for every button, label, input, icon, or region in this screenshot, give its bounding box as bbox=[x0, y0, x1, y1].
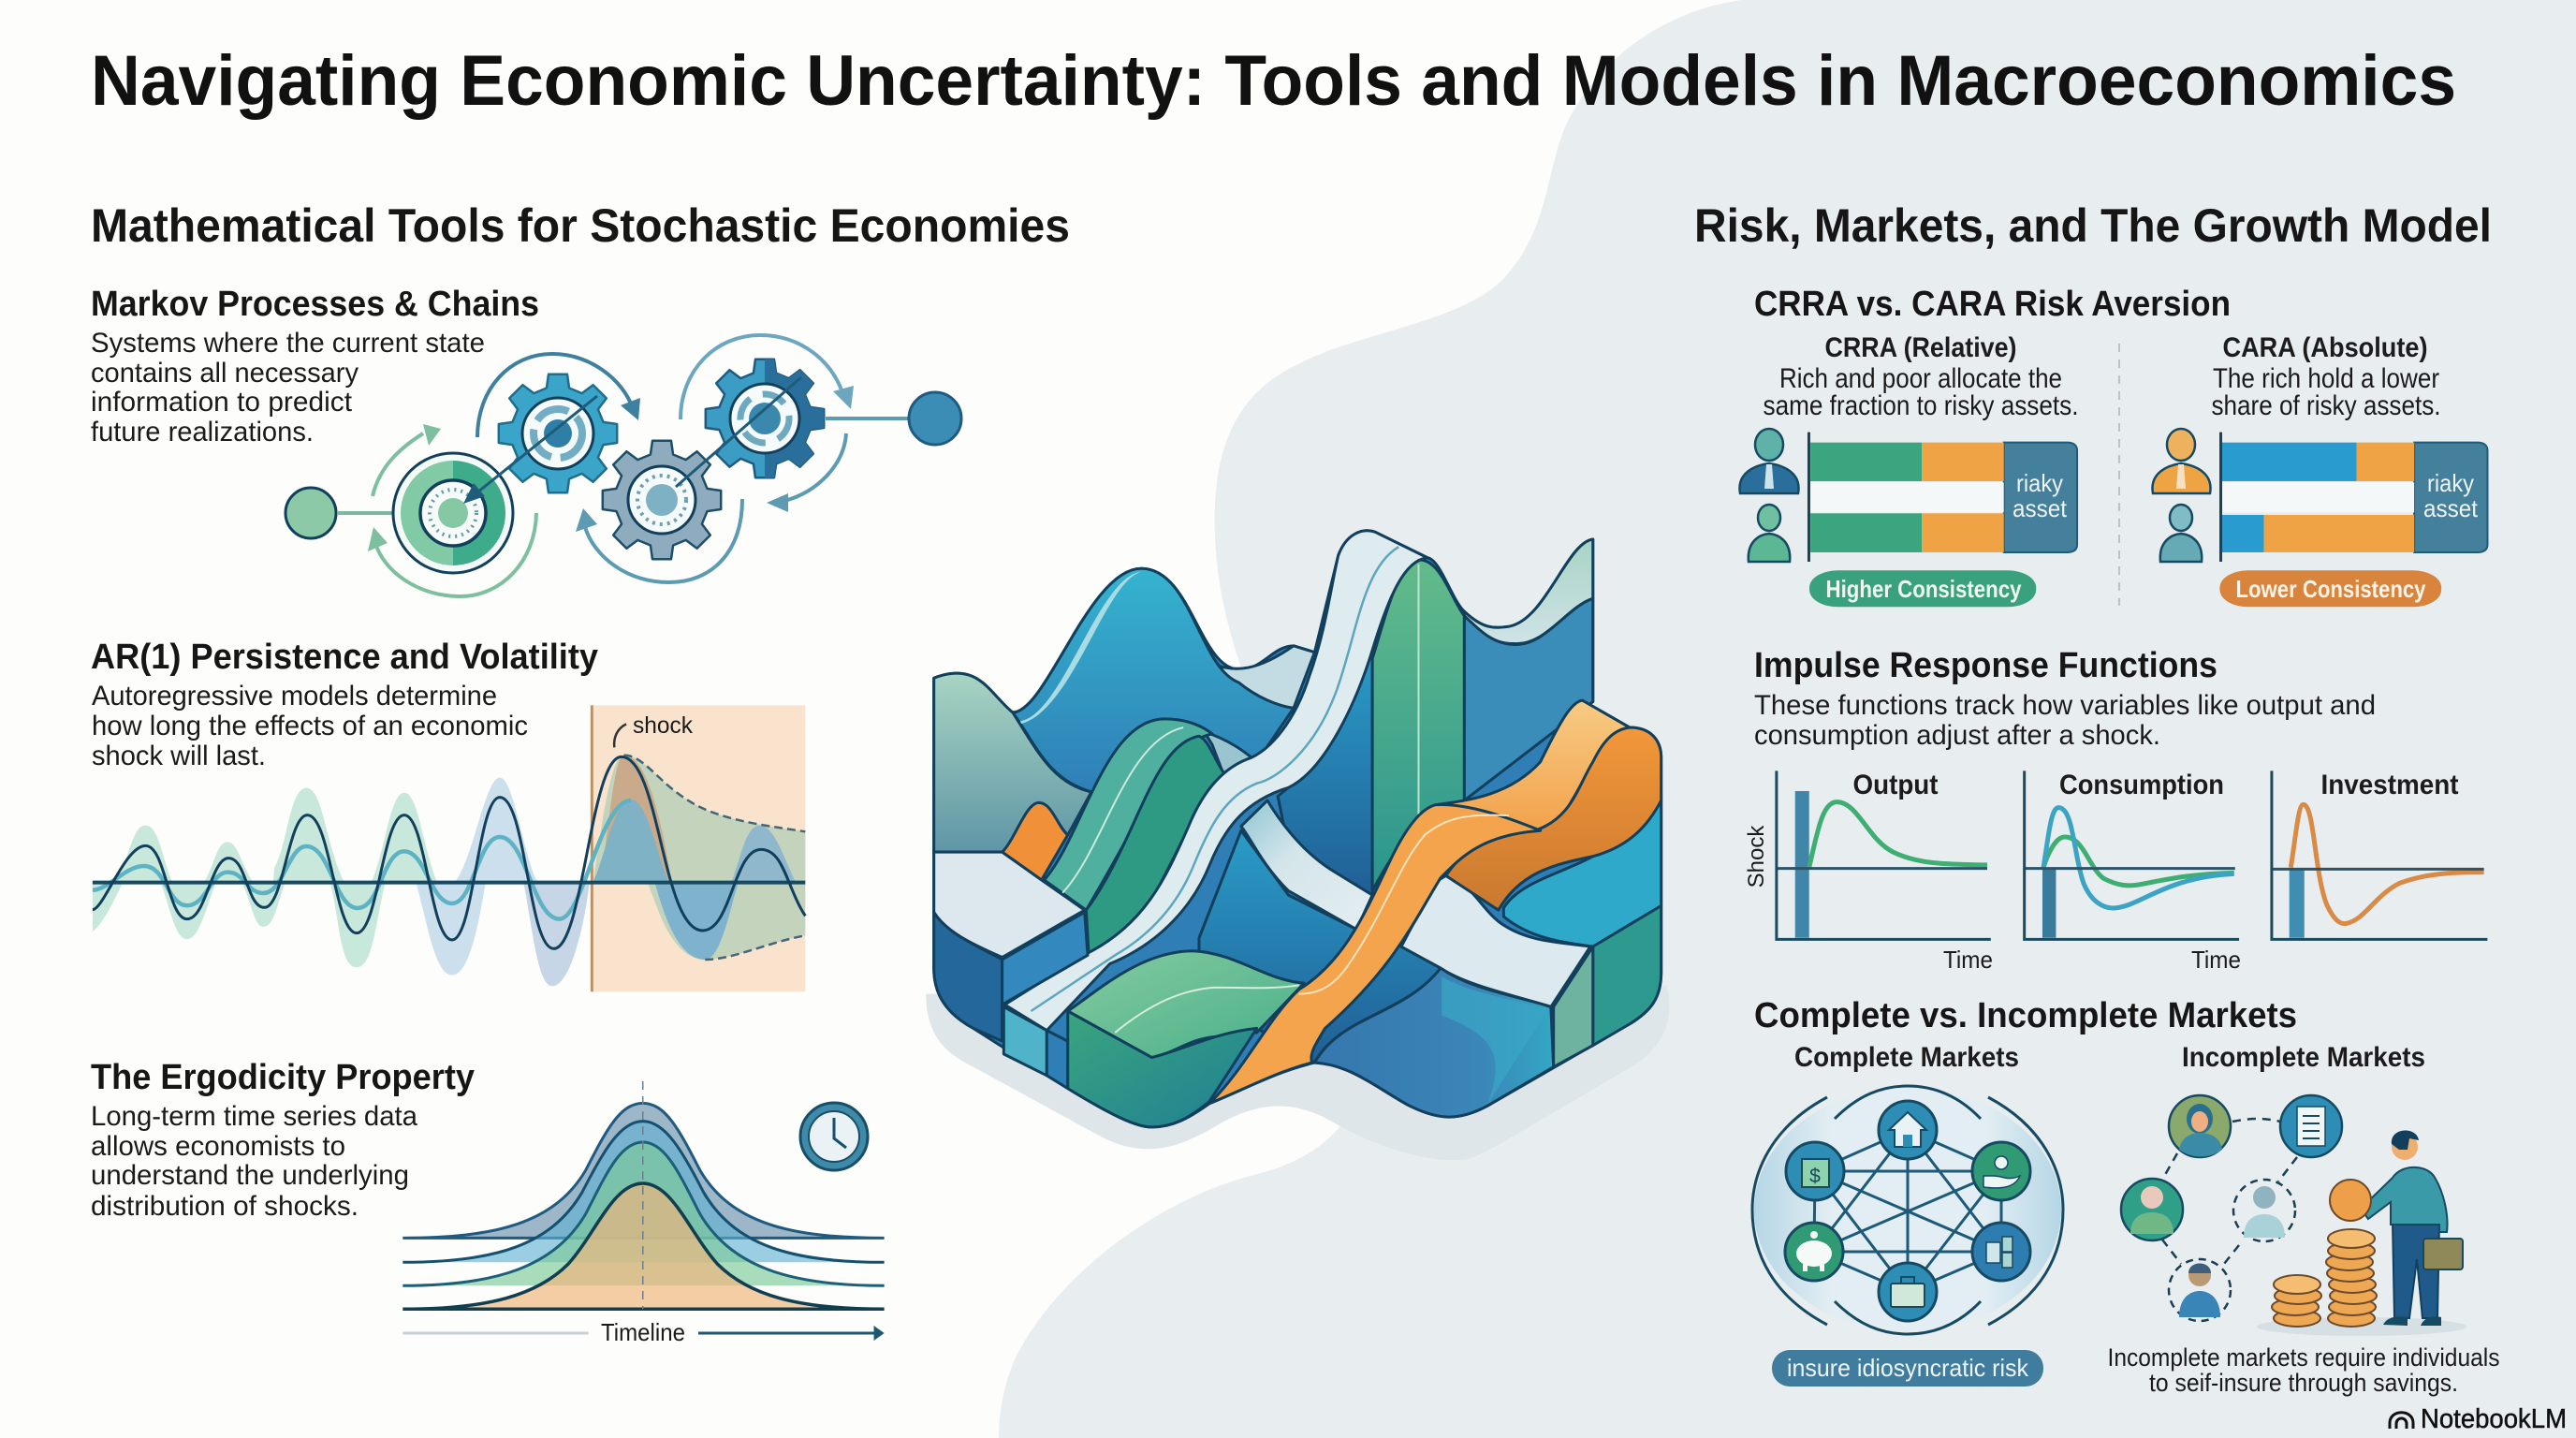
person: green bbox=[2121, 1179, 2183, 1240]
mid blue wall bbox=[1199, 830, 1441, 1063]
title: Navigating Economic Uncertainty: Tools and Models in Macroeconomics bbox=[91, 41, 2456, 121]
coin stack: short bbox=[2272, 1275, 2321, 1327]
orange peak small bbox=[1003, 802, 1068, 880]
label: investment: Investment bbox=[2321, 770, 2458, 800]
dark wave bbox=[93, 756, 805, 948]
dashed bound bbox=[623, 756, 805, 831]
node: calendar: $ bbox=[1809, 1166, 1821, 1187]
ground shadow bbox=[926, 985, 1669, 1160]
front blue wall bbox=[1314, 968, 1554, 1117]
centre deep wall bbox=[1278, 650, 1372, 895]
node: boxes bbox=[1972, 1223, 2030, 1281]
background blob: right panel bbox=[999, 0, 2576, 1438]
panel: impulse response heading: Impulse Response Functions bbox=[1754, 646, 2217, 685]
left block top bbox=[934, 852, 1085, 958]
coin stack: tall bbox=[2326, 1229, 2377, 1327]
label: incomplete markets: Incomplete Markets bbox=[2182, 1042, 2425, 1073]
bell layer 3 bbox=[402, 1142, 885, 1285]
text: markov description: Systems where the current state bbox=[91, 328, 485, 359]
shoes bbox=[2383, 1316, 2441, 1326]
text: CRRA description: same fraction to risky assets. bbox=[1764, 390, 2078, 421]
label: higher consistency: Higher Consistency bbox=[1825, 575, 2022, 603]
right light band bbox=[1401, 875, 1590, 1006]
sphere arcs bbox=[1752, 1086, 2063, 1334]
text: incomplete markets caption bbox=[2108, 1343, 2499, 1397]
arrow: gear 2 loop bbox=[576, 499, 742, 582]
text: AR(1) description bbox=[92, 681, 528, 771]
base silhouette bbox=[934, 531, 1661, 1127]
chart: risk allocation bars bbox=[1808, 433, 2487, 607]
icon: document bbox=[2280, 1095, 2342, 1157]
CARA bars bbox=[2221, 433, 2487, 562]
far right wall blue bbox=[1464, 598, 1593, 800]
labels: risky asset left: asset bbox=[2012, 494, 2068, 522]
head bbox=[2392, 1134, 2418, 1160]
label: insure idiosyncratic risk: insure idiosyncratic risk bbox=[1787, 1354, 2029, 1382]
node: piggy bank bbox=[1785, 1223, 1843, 1281]
bell layer 2 bbox=[402, 1122, 885, 1262]
heading: left section: Mathematical Tools for Stochastic Economies bbox=[91, 199, 1070, 252]
text: incomplete markets caption: Incomplete markets require individuals bbox=[2108, 1343, 2499, 1372]
icon: poor person CARA bbox=[2160, 505, 2202, 562]
arrow: green top bbox=[373, 424, 441, 496]
pill: lower consistency bbox=[2219, 570, 2441, 607]
text: impulse response description: consumption adjust after a shock. bbox=[1754, 720, 2160, 751]
labels: risky asset right: asset bbox=[2423, 494, 2479, 522]
text: CARA description bbox=[2211, 363, 2441, 421]
far right wall light bbox=[1464, 539, 1593, 644]
gear: green dial bbox=[393, 453, 513, 573]
orange ribbon diagonal bbox=[1209, 804, 1541, 1104]
tall green wall bbox=[1372, 560, 1464, 890]
volatility bands: green bbox=[93, 788, 438, 967]
text: CRRA description: Rich and poor allocate the bbox=[1779, 363, 2062, 394]
right green corner bbox=[1593, 906, 1661, 1046]
sphere background bbox=[1754, 1088, 2061, 1331]
text: ergodicity description bbox=[91, 1101, 417, 1222]
text: markov description: information to predict bbox=[91, 387, 353, 418]
text: incomplete markets caption: to seif-insure through savings. bbox=[2149, 1369, 2458, 1397]
text: CARA label: CARA (Absolute) bbox=[2222, 332, 2428, 363]
right teal wall bbox=[1503, 800, 1661, 946]
panel: AR(1) heading: AR(1) Persistence and Volatility bbox=[91, 638, 598, 677]
person: dashed grey bbox=[2233, 1180, 2295, 1241]
person: dashed blue bbox=[2169, 1259, 2231, 1321]
shock panel bbox=[592, 705, 805, 991]
diagram: markov gears bbox=[285, 335, 961, 596]
text: AR(1) description: Autoregressive models determine bbox=[92, 681, 497, 712]
text: ergodicity description: Long-term time series data bbox=[91, 1101, 417, 1132]
ground shadow bbox=[2257, 1317, 2466, 1336]
chart: consumption bbox=[2025, 770, 2239, 939]
green arch front bbox=[1086, 736, 1225, 955]
text: markov description: contains all necessary bbox=[91, 358, 359, 389]
panel: ergodicity heading: The Ergodicity Property bbox=[91, 1058, 475, 1097]
coin bbox=[2330, 1180, 2371, 1221]
label: shock axis: Shock bbox=[1744, 825, 1769, 888]
orange ribbon upper bbox=[1435, 700, 1630, 830]
bell layer 4 bbox=[402, 1183, 885, 1309]
shock envelope bbox=[593, 756, 805, 960]
node: house bbox=[1879, 1101, 1937, 1159]
text: ergodicity description: distribution of shocks. bbox=[91, 1191, 359, 1222]
dashed links bbox=[2162, 1119, 2297, 1264]
briefcase bbox=[2423, 1239, 2463, 1269]
labels: risky asset right: riaky bbox=[2427, 469, 2474, 497]
labels: risky asset right bbox=[2423, 469, 2479, 522]
green block front bbox=[1068, 1011, 1257, 1127]
second light ribbon bbox=[1241, 800, 1372, 930]
label: time axis 1: Time bbox=[1943, 946, 1993, 974]
back wave light bbox=[1215, 646, 1314, 708]
mean line bbox=[642, 1081, 644, 1309]
arrow: gear 3 return bbox=[767, 433, 846, 512]
text: CRRA description bbox=[1764, 363, 2078, 421]
chart: output bbox=[1777, 770, 1991, 939]
node: helping hand bbox=[1972, 1142, 2030, 1200]
green block top bbox=[1068, 951, 1304, 1058]
diagram: complete markets network bbox=[1752, 1086, 2063, 1334]
panel: markets heading: Complete vs. Incomplete Markets bbox=[1754, 996, 2297, 1035]
text: ergodicity description: allows economists to bbox=[91, 1131, 345, 1162]
node: end bbox=[909, 392, 961, 445]
labels: risky asset left: riaky bbox=[2016, 469, 2063, 497]
orange ribbon face bbox=[1446, 727, 1661, 910]
charts: impulse responses bbox=[1777, 770, 2487, 939]
label: timeline: Timeline bbox=[601, 1318, 685, 1346]
label: consumption: Consumption bbox=[2059, 770, 2224, 800]
bell layer 1 bbox=[402, 1103, 885, 1238]
label: lower consistency: Lower Consistency bbox=[2235, 575, 2426, 603]
network lines bbox=[1814, 1130, 2001, 1292]
panel: CRRA vs CARA heading: CRRA vs. CARA Risk Aversion bbox=[1754, 285, 2231, 324]
volatility bands: blue bbox=[417, 778, 590, 986]
green arch light side bbox=[1044, 719, 1212, 910]
text: CRRA label: CRRA (Relative) bbox=[1825, 332, 2016, 363]
pill: higher consistency bbox=[1809, 570, 2036, 607]
arrow: gear 3 loop bbox=[681, 335, 854, 419]
chart: investment bbox=[2272, 770, 2487, 939]
small step blocks bbox=[1003, 1006, 1046, 1076]
left pale wall bbox=[934, 673, 1091, 852]
label: time axis 2: Time bbox=[2191, 946, 2241, 974]
labels: risky asset left bbox=[2012, 469, 2068, 522]
left block front bbox=[934, 912, 1003, 1041]
node: calendar bbox=[1786, 1142, 1844, 1200]
node: start bbox=[285, 488, 336, 538]
chart: stacked distributions bbox=[402, 1081, 885, 1341]
text: ergodicity description: understand the underlying bbox=[91, 1160, 409, 1191]
panel: markov heading: Markov Processes & Chains bbox=[91, 285, 539, 324]
text: AR(1) description: shock will last. bbox=[92, 741, 266, 771]
axis bbox=[93, 881, 805, 885]
back wave blue bbox=[1013, 568, 1294, 792]
teal wave bbox=[93, 800, 631, 919]
timeline arrow bbox=[402, 1331, 589, 1334]
text: CARA description: share of risky assets. bbox=[2211, 390, 2441, 421]
label: output: Output bbox=[1853, 770, 1939, 800]
logo: NotebookLM: NotebookLM bbox=[2421, 1404, 2567, 1434]
icon: rich person CARA bbox=[2152, 429, 2211, 493]
label: shock: shock bbox=[633, 712, 693, 739]
gear: dark blue bbox=[706, 360, 824, 477]
text: impulse response description: These functions track how variables like output and bbox=[1754, 690, 2376, 721]
text: markov description: future realizations. bbox=[91, 417, 314, 448]
gear: grey bbox=[603, 441, 721, 559]
CRRA bars bbox=[1808, 433, 2077, 562]
text: impulse response description bbox=[1754, 690, 2376, 751]
person: olive bbox=[2169, 1095, 2231, 1157]
text: markov description bbox=[91, 328, 485, 448]
heading: right section: Risk, Markets, and The Growth Model bbox=[1694, 199, 2492, 252]
left block side bbox=[1003, 912, 1088, 1005]
chart: AR(1) oscillation bbox=[93, 705, 805, 991]
icon: rich person CRRA bbox=[1739, 429, 1799, 493]
legs bbox=[2393, 1222, 2439, 1318]
figure: person saving bbox=[2330, 1131, 2463, 1326]
arrow: gear 1 loop bbox=[477, 354, 640, 437]
gear: blue bbox=[499, 374, 617, 492]
text: AR(1) description: how long the effects of an economic bbox=[92, 711, 528, 741]
arrow: green bottom bbox=[368, 513, 536, 596]
arrow: shock bbox=[614, 724, 626, 747]
node: briefcase bbox=[1879, 1263, 1937, 1321]
pill: insure idiosyncratic risk bbox=[1772, 1350, 2043, 1387]
light arch backing bbox=[1205, 732, 1254, 779]
illustration: central 3D surface bbox=[926, 531, 1669, 1160]
icon: poor person CRRA bbox=[1749, 505, 1790, 562]
torso bbox=[2361, 1167, 2447, 1232]
first light ribbon bbox=[1004, 531, 1427, 1031]
label: complete markets: Complete Markets bbox=[1794, 1042, 2019, 1073]
icon: clock bbox=[800, 1103, 868, 1170]
text: CARA description: The rich hold a lower bbox=[2213, 363, 2439, 394]
arrows: connecting lines bbox=[463, 377, 801, 504]
diagram: incomplete markets network bbox=[2121, 1095, 2466, 1336]
